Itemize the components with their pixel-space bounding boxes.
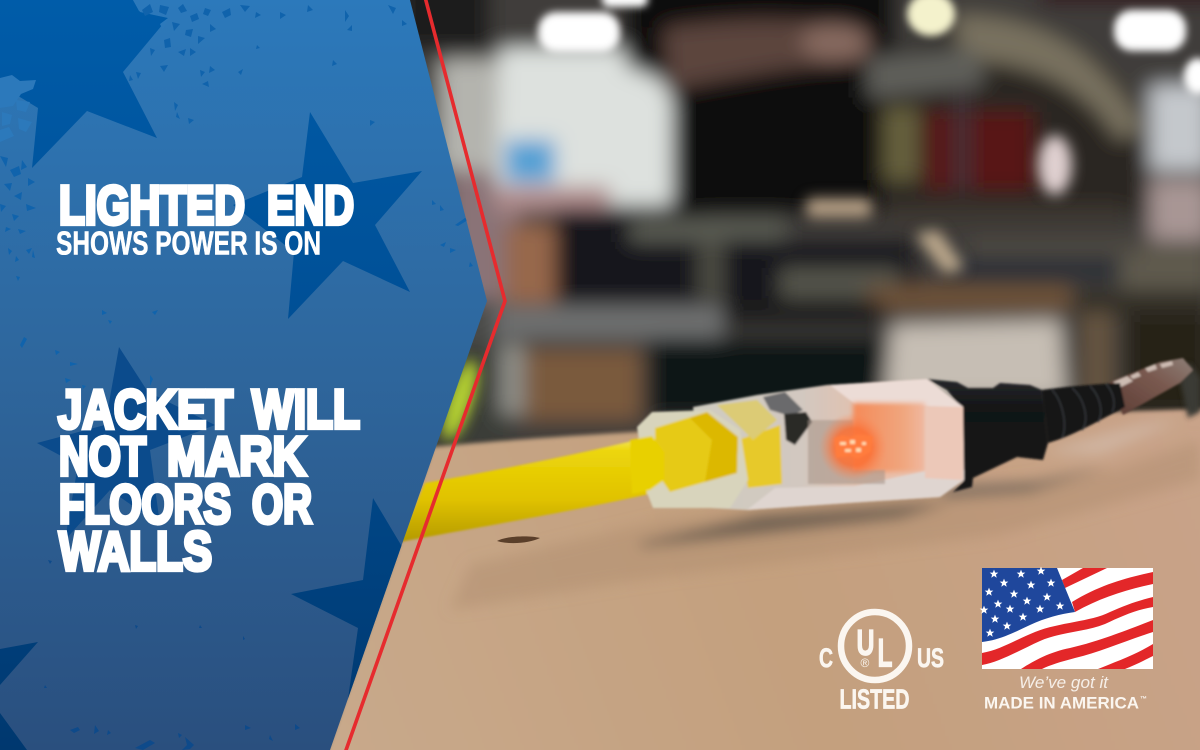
heading: jacket will not mark floors or walls: FLOORS: [59, 474, 231, 535]
grey smudge: [763, 392, 803, 416]
bright filament: [819, 413, 887, 481]
star: lower right: [291, 498, 402, 700]
dark rear cable end: [1180, 362, 1200, 418]
overhead lights: [538, 0, 1200, 94]
distressed lighter texture over star: [0, 0, 168, 142]
subheading: shows power is on: SHOWS POWER IS ON: [56, 224, 321, 262]
dark internal contact: [784, 412, 812, 445]
clear lighted connector body: [693, 379, 964, 510]
bottom dark speckles: [44, 560, 300, 750]
right facet: [925, 407, 963, 480]
scattered dark speckles: [0, 4, 473, 389]
frosted lower band: [747, 470, 964, 510]
heading: lighted end: LIGHTED: [59, 175, 245, 236]
black plug: [927, 379, 1048, 492]
heading: jacket will not mark floors or walls: WILL: [252, 379, 360, 440]
tagline: We've got it: We’ve got it: [1019, 674, 1109, 692]
UL listed logo: L: [878, 632, 892, 676]
UL ring: [841, 612, 909, 680]
frosted top band: [830, 379, 963, 407]
star: bottom left: [0, 642, 38, 750]
circuit window: [808, 420, 885, 484]
rib grooves: [1052, 384, 1114, 438]
star: behind jacket heading: [37, 347, 215, 540]
heading: lighted end: [56, 175, 354, 262]
heading: jacket will not mark floors or walls: WALLS: [59, 521, 212, 582]
star: behind lighted end heading: [233, 112, 422, 319]
yellow inner sleeve: [738, 425, 782, 488]
flag stars: [980, 567, 1064, 637]
orange lit interior: [853, 403, 925, 472]
heading: lighted end: END: [267, 175, 354, 236]
copper-coloured rear cable: [1110, 358, 1193, 415]
left blue panel: [0, 0, 500, 750]
extension cord with lighted end: [400, 358, 1200, 542]
star: top left: [0, 0, 168, 168]
tagline: made in America: MADE IN AMERICA: [984, 694, 1139, 712]
heading: jacket will not mark floors or walls: OR: [252, 474, 312, 535]
yellow cable: [400, 436, 666, 542]
heading: jacket will not mark floors or walls: JACKET: [58, 379, 233, 440]
UL listed logo: LISTED: [840, 684, 910, 714]
clear collar face: [637, 410, 748, 508]
UL listed logo: [819, 612, 944, 714]
yellow collar inner ring: [690, 412, 738, 482]
UL listed logo: US: [917, 643, 944, 673]
trademark symbol: ™: [1140, 696, 1147, 703]
photo: blurred workshop background: [380, 0, 1200, 490]
UL listed logo: ®: [860, 656, 870, 670]
UL listed logo: U: [856, 622, 874, 663]
table shadows and streaks: [450, 420, 1200, 610]
UL listed logo: C: [819, 643, 833, 673]
heading: jacket will not mark floors or walls: [58, 379, 360, 582]
yellow collar: [655, 412, 738, 492]
black ribbed strain relief: [1042, 383, 1125, 443]
background highlights: [435, 135, 1072, 444]
wood chip mark: [497, 536, 540, 543]
heading: jacket will not mark floors or walls: NOT: [59, 426, 146, 487]
flag canton: [982, 568, 1075, 642]
wooden table surface: [320, 408, 1200, 750]
heading: jacket will not mark floors or walls: MARK: [167, 426, 306, 487]
pale yellow frosted sleeve: [717, 400, 777, 440]
copper highlights: [1113, 361, 1173, 387]
yellow cable end inside collar: [630, 436, 664, 494]
red chevron line: [345, 0, 505, 750]
American flag: [980, 567, 1153, 669]
